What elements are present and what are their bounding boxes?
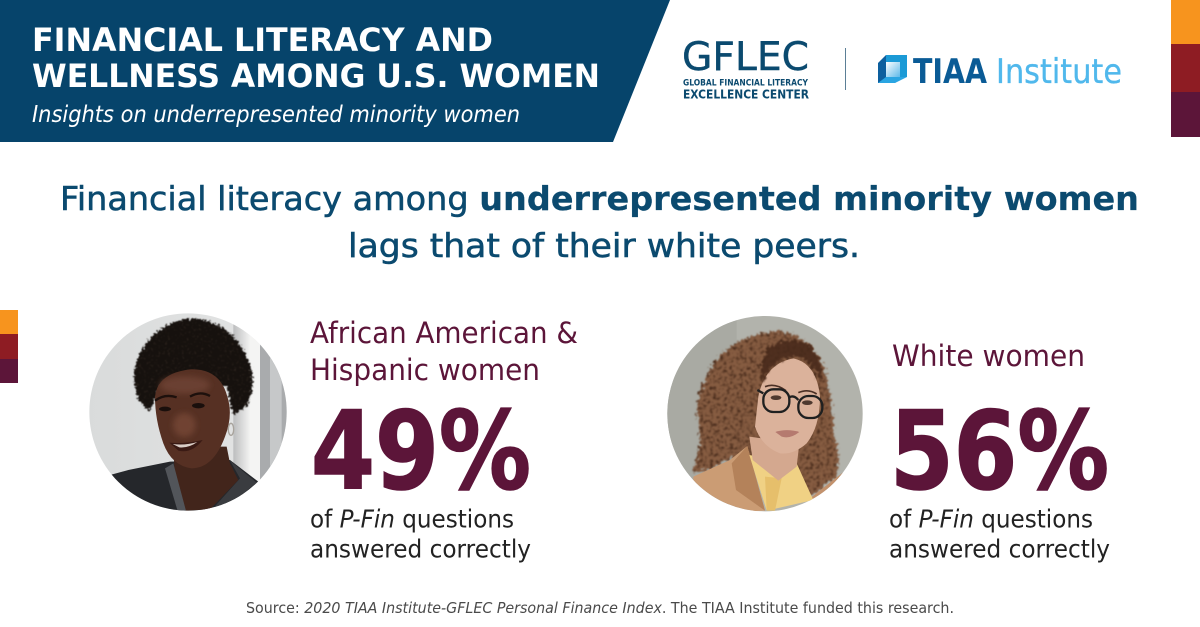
stat caption: 56% [889,504,1110,564]
source note: Source: 2020 TIAA Institute-GFLEC Personal Finance Index. The TIAA Institute funded this research. [246,599,954,617]
banner title [32,21,600,95]
stat label: African American & Hispanic women [310,316,578,387]
stat label: African American & Hispanic women: Hispanic women [310,353,540,387]
logo: TIAA Institute [878,52,1122,92]
stat: 56%: 56% [890,390,1109,514]
logo: GFLEC [682,35,809,102]
photo: African American woman [87,310,290,513]
stat caption: 56%: answered correctly [889,534,1110,564]
color strip: top right [1171,0,1200,137]
banner subtitle: Insights on underrepresented minority women [32,102,520,128]
headline: Financial literacy among underrepresented minority women [60,179,1139,218]
stat label: White women: White women [892,339,1085,373]
banner title: WELLNESS AMONG U.S. WOMEN [32,57,600,95]
stat label: African American & Hispanic women: African American & [310,316,578,350]
icon: TIAA mark [878,55,907,83]
stat caption: 49%: answered correctly [310,534,531,564]
headline [60,179,1139,265]
headline: lags that of their white peers. [348,226,860,265]
photo: white woman [663,313,867,517]
header banner [0,0,670,142]
stat: 49%: 49% [311,390,531,514]
wordmark Institute: Institute [996,52,1122,92]
stat caption: 49% [310,504,531,564]
banner title: FINANCIAL LITERACY AND [32,21,493,59]
logo: GFLEC: GLOBAL FINANCIAL LITERACY [683,78,808,88]
logo: GFLEC: GFLEC [682,35,809,80]
stat caption: 56%: of P-Fin questions [889,504,1093,534]
wordmark TIAA: TIAA [913,52,988,92]
logo divider [845,48,846,90]
stat caption: 49%: of P-Fin questions [310,504,514,534]
logo: GFLEC: EXCELLENCE CENTER [683,88,809,102]
color strip: left [0,310,18,383]
